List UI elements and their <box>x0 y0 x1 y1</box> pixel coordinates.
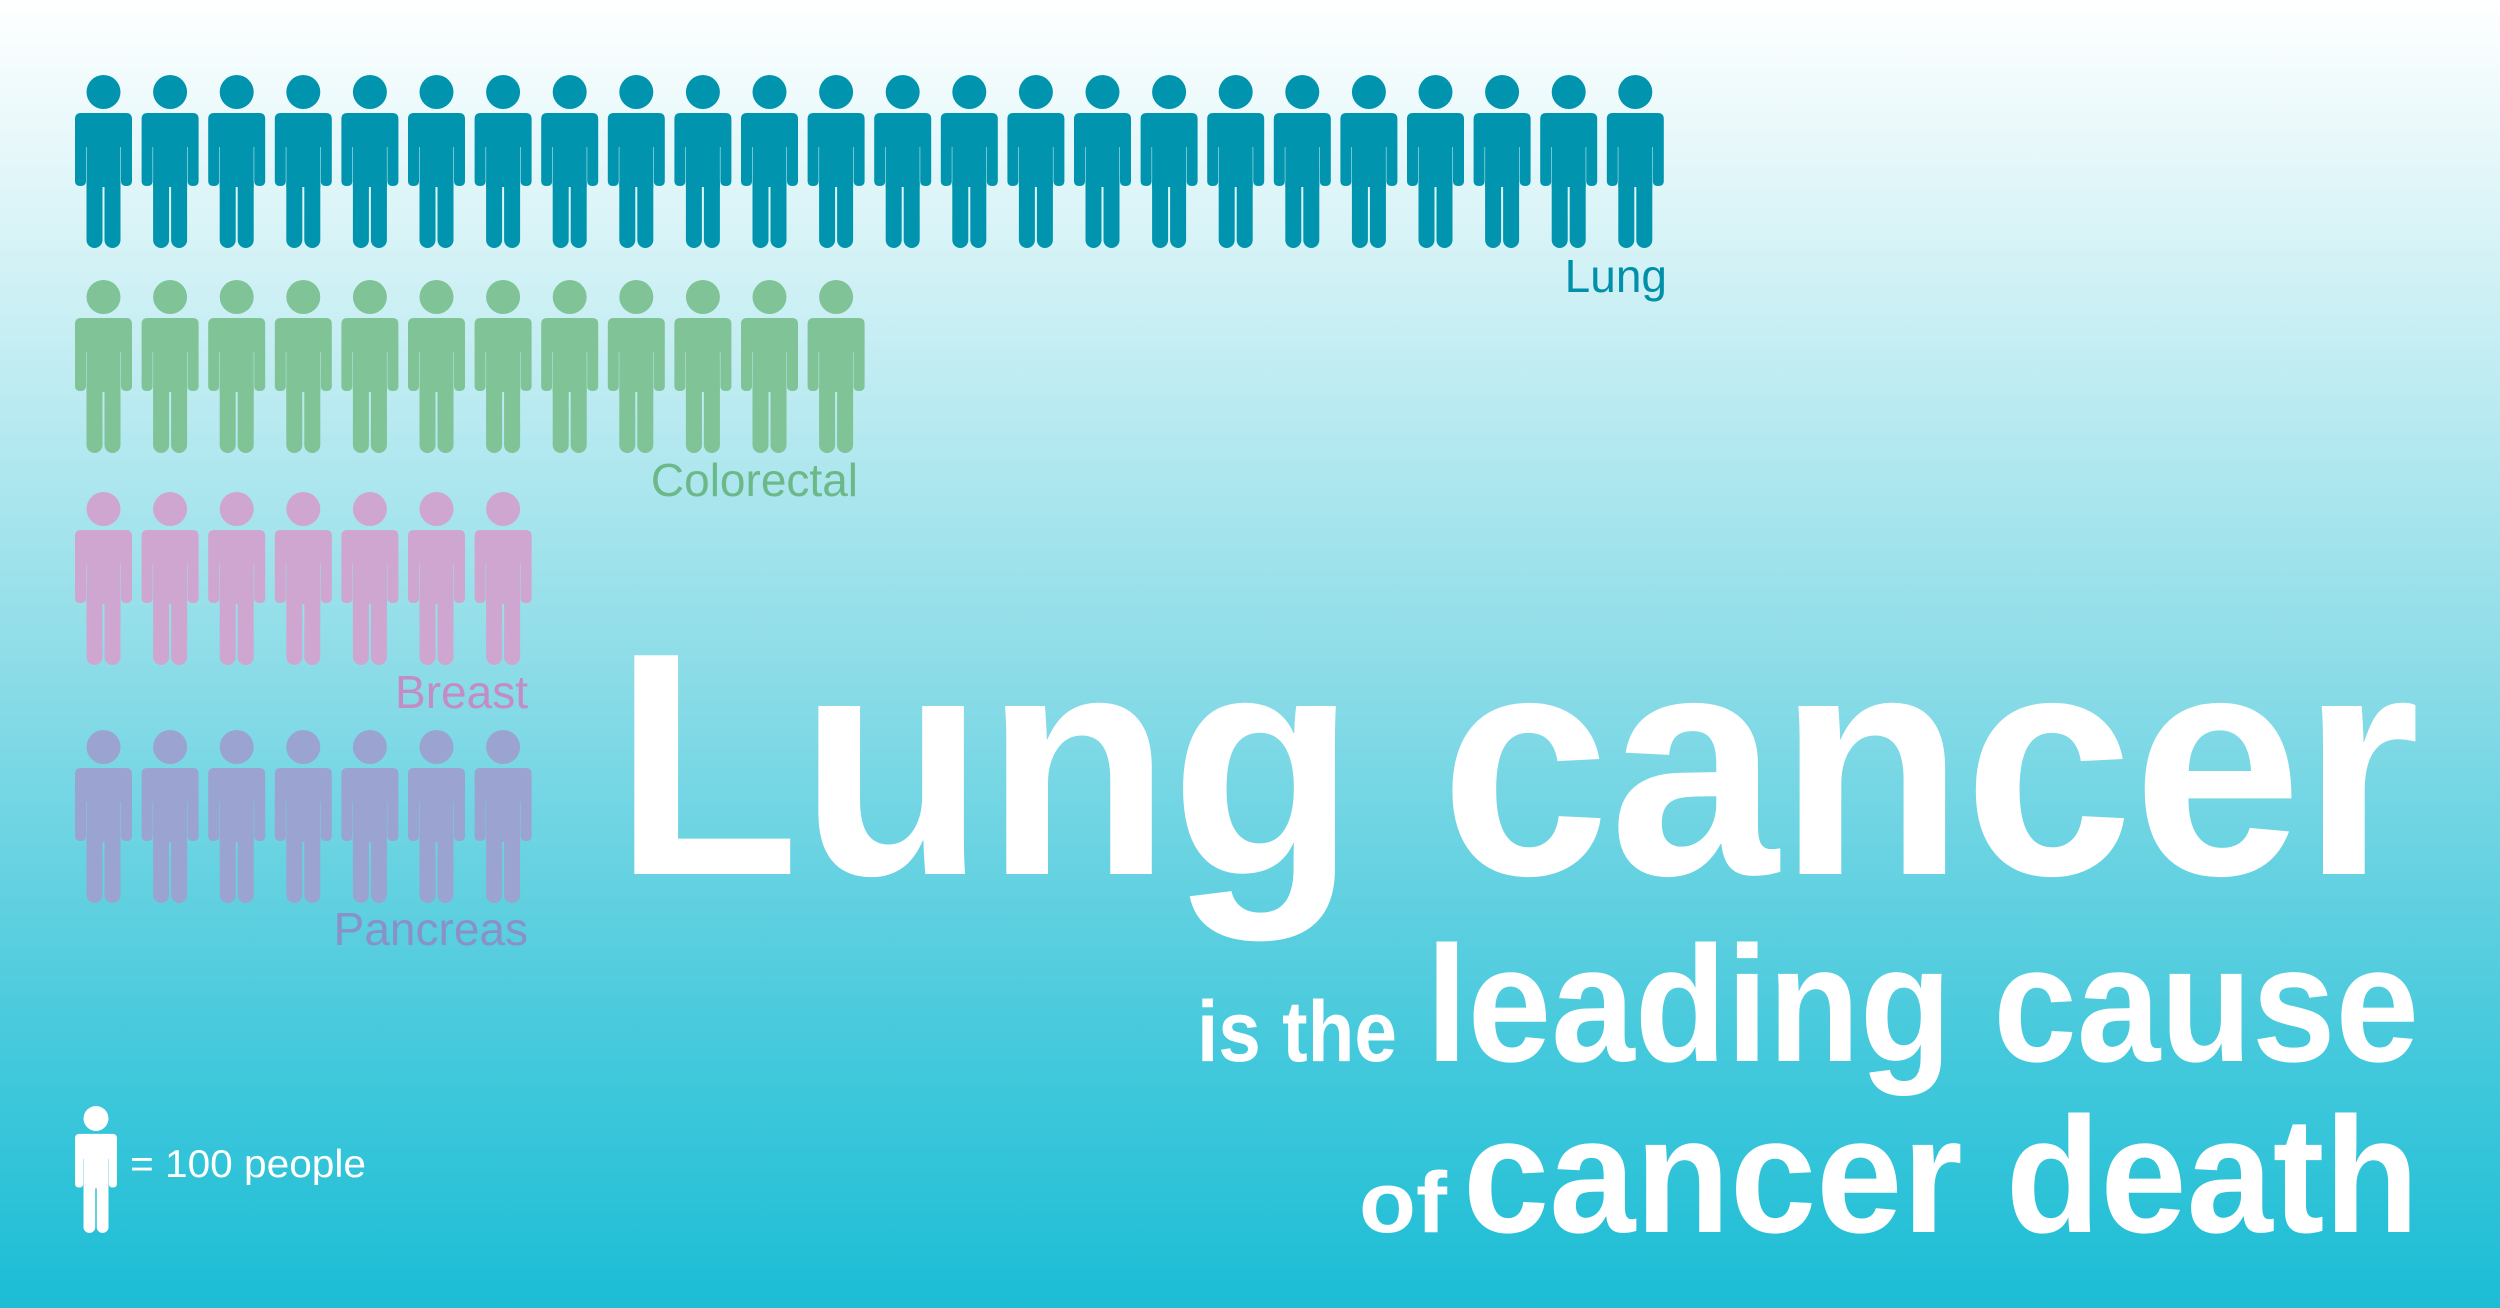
legend: = 100 people <box>130 1143 366 1186</box>
icon: person <box>75 1106 117 1233</box>
row: lung 24 people <box>75 75 1664 248</box>
row: pancreas 7 people <box>75 730 532 903</box>
label: pancreas: Pancreas <box>334 903 528 955</box>
subtitle line 2: of <box>1359 1155 1447 1251</box>
label: colorectal: Colorectal <box>651 454 858 506</box>
subtitle line 1: leading cause <box>1426 912 2419 1096</box>
label: breast: Breast <box>395 666 528 718</box>
row: colorectal 12 people <box>75 280 865 453</box>
subtitle line 2: cancer death <box>1463 1083 2419 1267</box>
subtitle line 1: is the <box>1197 984 1397 1080</box>
label: lung: Lung <box>1565 250 1667 302</box>
row: breast 7 people <box>75 492 532 665</box>
title: Lung cancer <box>614 587 2420 944</box>
legend <box>75 1106 366 1233</box>
